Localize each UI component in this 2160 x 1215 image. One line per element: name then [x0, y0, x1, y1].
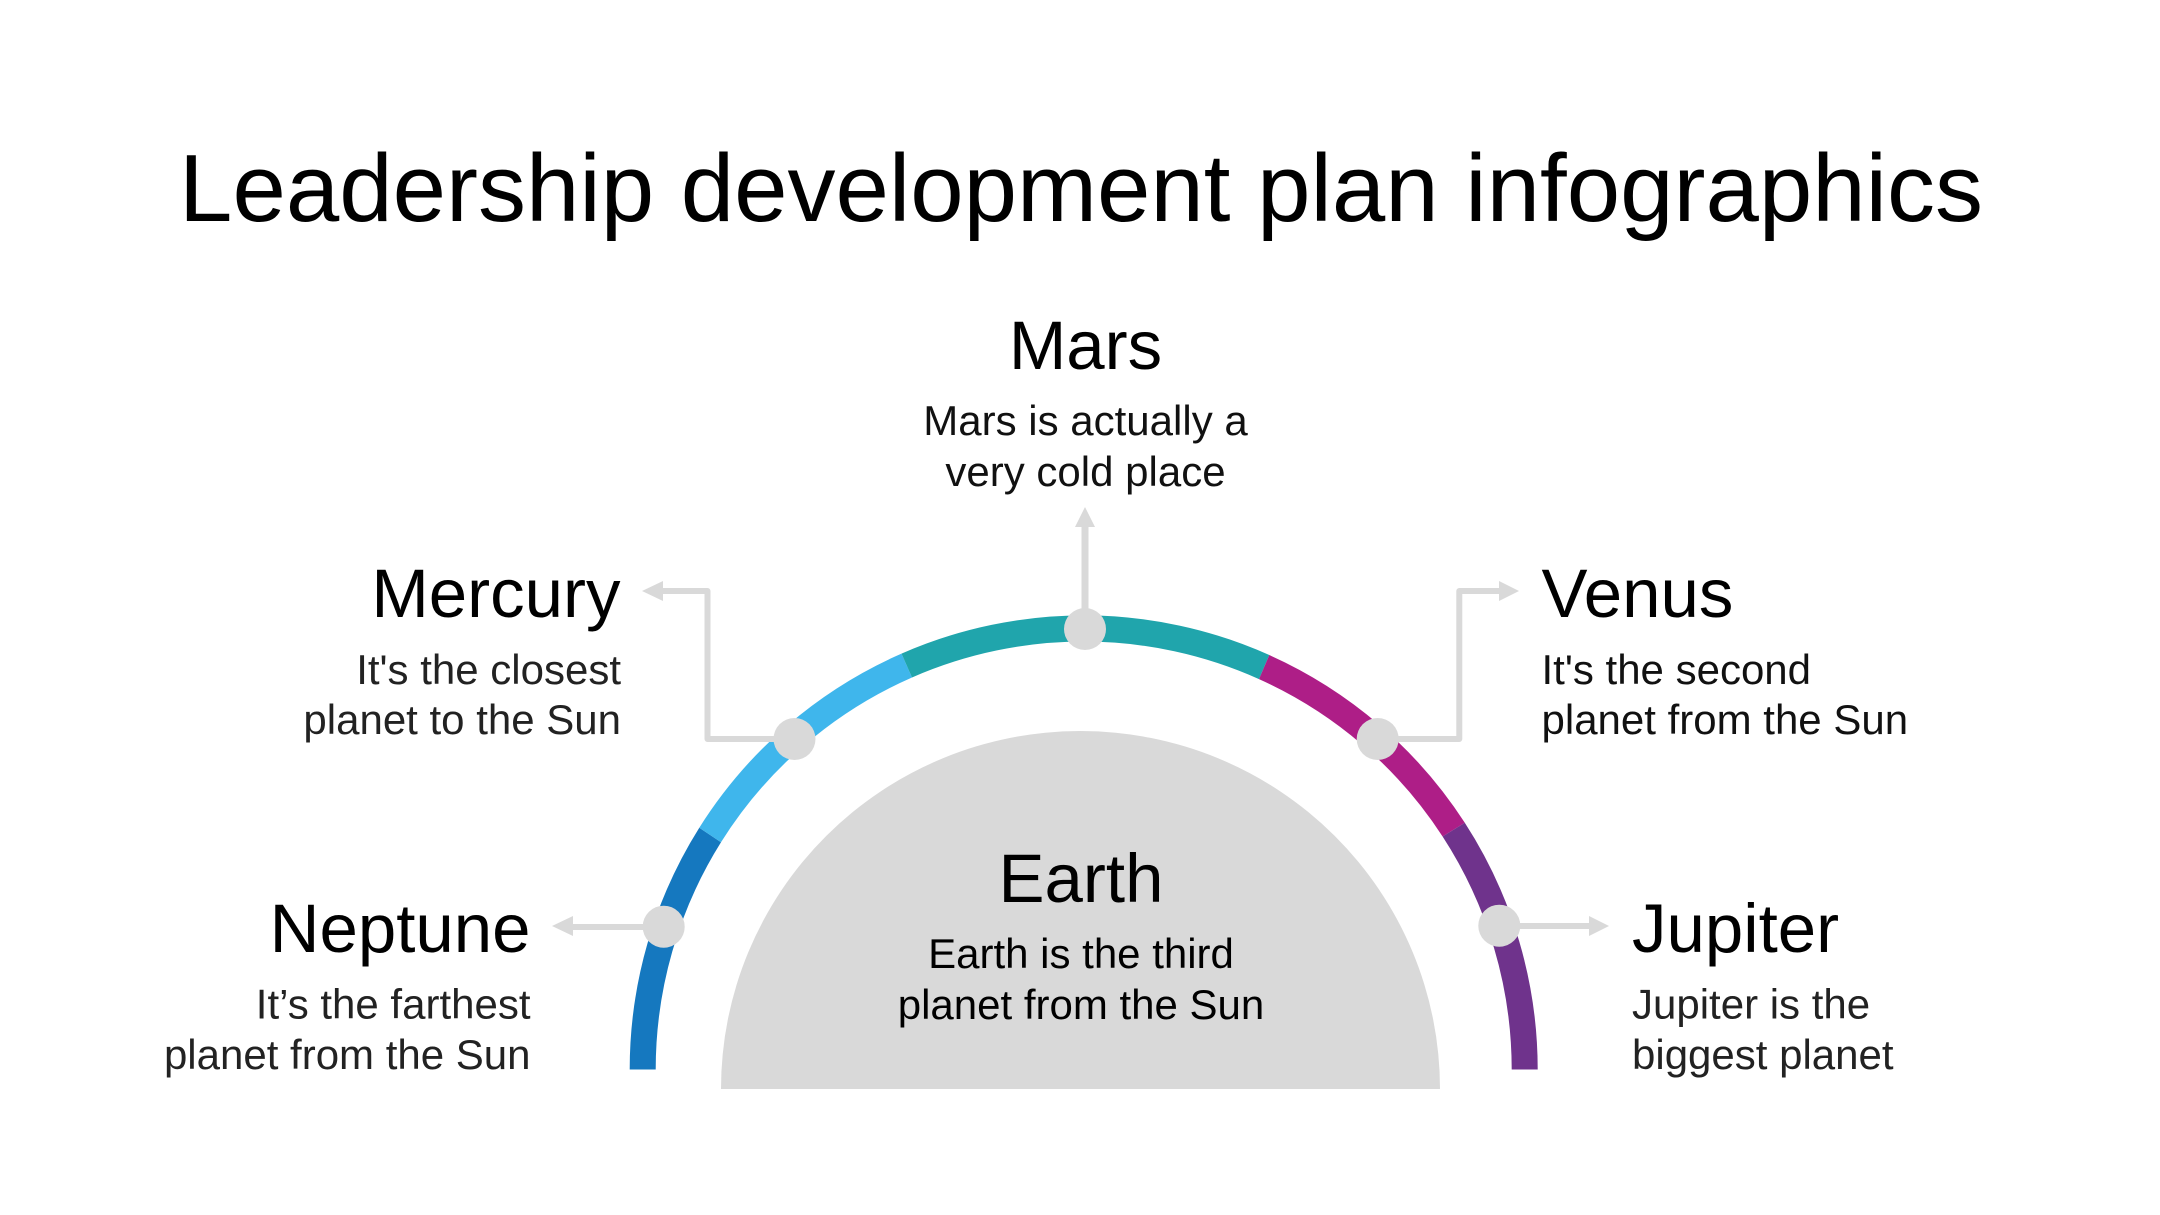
text block: Mars: Mars — [1009, 307, 1162, 384]
arc segment: magenta — [1259, 655, 1465, 836]
text block: Jupiter: biggest planet — [1632, 1031, 1894, 1078]
text block: Mars: Mars is actually a — [923, 397, 1248, 444]
node: Venus dot — [1357, 718, 1399, 760]
text block: Neptune — [164, 890, 531, 1078]
text block: Neptune: planet from the Sun — [164, 1031, 530, 1078]
arc segment: purple — [1443, 823, 1538, 1070]
text block: Venus: It's the second — [1542, 646, 1811, 693]
text block: Venus — [1542, 555, 1908, 743]
node: Neptune dot — [643, 906, 685, 948]
text block: Jupiter: Jupiter is the — [1632, 980, 1870, 1028]
arrow: Venus connector — [1378, 581, 1519, 739]
text block: Mars: very cold place — [945, 448, 1226, 495]
arrow: Neptune connector — [552, 916, 664, 936]
arc segment: blue — [630, 828, 721, 1070]
text block: Neptune: Neptune — [270, 890, 530, 967]
text block: Venus: Venus — [1542, 555, 1733, 632]
center semicircle: Earth — [721, 731, 1440, 1089]
title: Leadership development plan infographics — [179, 135, 1983, 242]
arc segment: light blue — [699, 654, 912, 842]
arrow: Mercury connector — [642, 581, 795, 739]
node: Mars dot — [1064, 608, 1106, 650]
text block: Jupiter — [1632, 890, 1894, 1078]
text block: Neptune: It’s the farthest — [256, 980, 531, 1028]
text block: Mercury: planet to the Sun — [303, 696, 621, 743]
node: Jupiter dot — [1478, 905, 1520, 947]
arrow: Mars connector — [1075, 507, 1095, 629]
text block: Venus: planet from the Sun — [1542, 696, 1908, 743]
text: Earth description: Earth is the third — [928, 930, 1234, 977]
arc: multicolour segmented ring — [630, 615, 1538, 1070]
text block: Mercury: It's the closest — [356, 646, 621, 693]
arc segment: teal — [902, 615, 1269, 679]
text block: Jupiter: Jupiter — [1632, 890, 1839, 967]
node: Mercury dot — [774, 718, 816, 760]
text block: Mars — [923, 307, 1248, 495]
heading: Earth: Earth — [999, 840, 1163, 917]
text block: Mercury: Mercury — [371, 555, 621, 632]
text: Earth description: planet from the Sun — [898, 981, 1264, 1028]
text block: Mercury — [303, 555, 621, 743]
arrow: Jupiter connector — [1499, 916, 1609, 936]
